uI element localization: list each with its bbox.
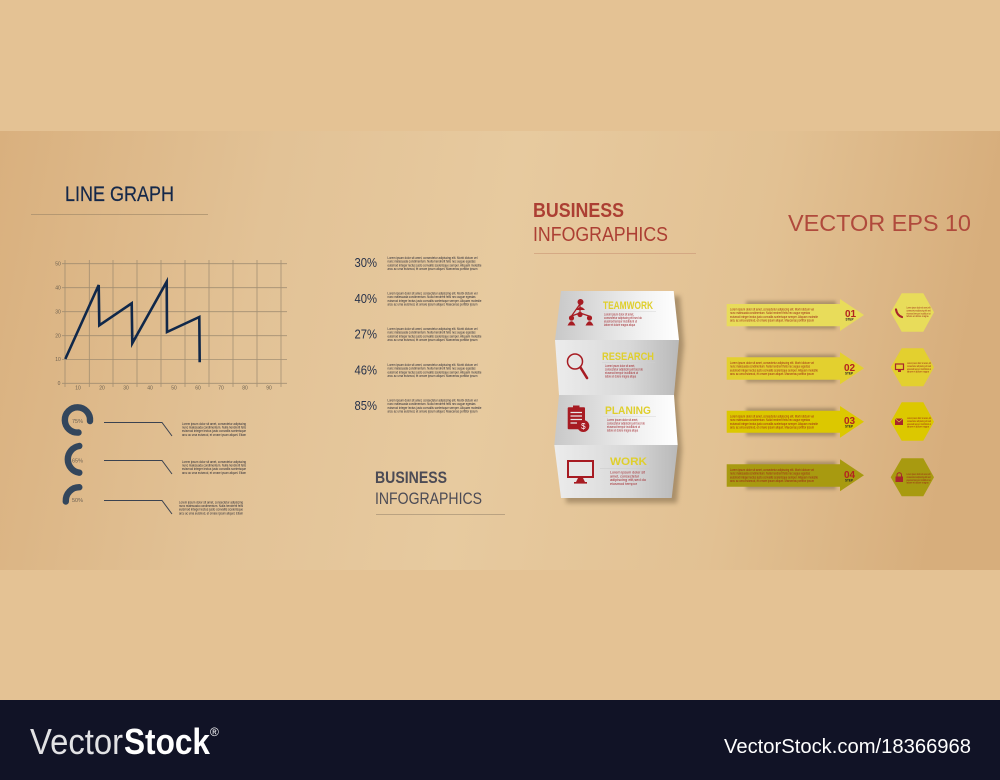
stat row 46%: euismod integer lectus justo convallis scelerisque semper. Aliquam molestie [388, 370, 482, 374]
donut row 65% [68, 446, 246, 475]
step arrow 04: euismod integer lectus justo convallis scelerisque semper. Aliquam molestie [730, 475, 818, 479]
stat row 40%: Lorem ipsum dolor sit amet, consectetur adipiscing elit. Morbi dictum vel [388, 292, 478, 296]
hexagon: mail: Lorem ipsum dolor sit amet, elit [907, 416, 931, 420]
step arrow 01: 01 [845, 309, 857, 320]
icon: padlock [896, 473, 903, 482]
step arrow 04 [727, 459, 864, 491]
step arrow 01: nunc malesuada condimentum. Nulla hendrerit felis nec augue egestas [730, 311, 810, 315]
step arrow 03: arcu ac urna euismod, et ornare ipsum aliquet. Maecenas porttitor ipsum [730, 426, 814, 430]
step arrow 04: STEP [845, 478, 854, 482]
stat row 40%: 40% [354, 292, 377, 306]
donut row 50%: 50% [72, 498, 83, 504]
step arrow 03: euismod integer lectus justo convallis scelerisque semper. Aliquam molestie [730, 422, 818, 426]
donut row 65%: euismod integer lectus justo convallis scelerisque [182, 467, 246, 471]
hexagon: lock: Lorem ipsum dolor sit amet, elit [906, 472, 931, 476]
y axis labels: 40 [55, 286, 61, 292]
donut row 65%: arcu ac urna euismod, et ornare ipsum aliquet. Etiam [182, 471, 246, 475]
donut row 75%: 75% [72, 419, 83, 425]
panel: planing: PLANING [605, 405, 651, 417]
step arrow 04: nunc malesuada condimentum. Nulla hendrerit felis nec augue egestas [730, 472, 810, 476]
panel: teamwork: Lorem ipsum dolor sit amet, [604, 312, 634, 316]
y axis labels: 30 [55, 310, 61, 316]
heading: business infographics grey: BUSINESS [375, 468, 447, 487]
stat row 85% [354, 398, 482, 414]
footer logo [30, 721, 219, 762]
title: vector eps 10: VECTOR EPS 10 [788, 210, 971, 236]
step arrow 01: STEP [846, 318, 854, 322]
stat row 27% [354, 327, 482, 342]
stat row 27%: nunc malesuada condimentum. Nulla hendrerit felis nec augue egestas [388, 331, 476, 335]
stat row 85%: euismod integer lectus justo convallis scelerisque semper. Aliquam molestie [388, 406, 482, 410]
panel: work: adipiscing elit,sed do [610, 478, 646, 482]
y axis labels: 20 [55, 334, 61, 340]
heading: business infographics grey: INFOGRAPHICS [375, 489, 482, 508]
panel: work: WORK [610, 456, 647, 468]
stat row 30%: euismod integer lectus justo convallis scelerisque semper. Aliquam molestie [388, 263, 482, 267]
stat row 85%: nunc malesuada condimentum. Nulla hendrerit felis nec augue egestas [388, 402, 476, 406]
panel: planing [554, 395, 678, 445]
stat row 85%: arcu ac urna euismod, et ornare ipsum aliquet. Maecenas porttitor ipsum [388, 410, 478, 414]
footer logo: Vector [30, 721, 123, 762]
stat row 27%: 27% [354, 328, 377, 342]
x axis labels: 90 [266, 386, 272, 392]
stat row 85%: 85% [354, 399, 377, 413]
x axis labels: 40 [147, 386, 153, 392]
x axis labels: 50 [171, 386, 177, 392]
stat row 40%: euismod integer lectus justo convallis scelerisque semper. Aliquam molestie [388, 299, 482, 303]
hexagon: lock: consectetur adipiscing elit sed [906, 475, 931, 479]
icon: envelope [895, 418, 903, 425]
step arrow 02: 02 [844, 363, 856, 374]
panel: teamwork: TEAMWORK [603, 300, 653, 312]
step arrow 03 [727, 406, 864, 438]
panel: teamwork: consectetur adipiscing elit sed do [604, 316, 642, 320]
heading: business infographics red [533, 200, 696, 254]
hexagon: lock: labore et dolore magna [906, 481, 929, 485]
footer bar [0, 700, 1000, 780]
panel: planing: consectetur adipiscing elit sed do [607, 422, 645, 426]
stat row 46%: arcu ac urna euismod, et ornare ipsum aliquet. Maecenas porttitor ipsum [388, 374, 478, 378]
donut row 75%: euismod integer lectus justo convallis scelerisque [182, 429, 246, 433]
icon: magnifier [568, 354, 587, 378]
step arrow 01 [727, 299, 864, 331]
panel: planing: Lorem ipsum dolor sit amet, [607, 418, 638, 422]
icon: small monitor [896, 364, 904, 372]
hexagon: monitor [891, 348, 934, 386]
heading: business infographics grey [375, 468, 505, 514]
step arrow 04: Lorem ipsum dolor sit amet, consectetur adipiscing elit. Morbi dictum vel [730, 468, 814, 472]
step arrow 04: arcu ac urna euismod, et ornare ipsum aliquet. Maecenas porttitor ipsum [730, 479, 814, 483]
footer url: VectorStock.com/18366968 [724, 736, 971, 758]
step arrow 04: 04 [844, 470, 856, 481]
step arrow 01: arcu ac urna euismod, et ornare ipsum aliquet. Maecenas porttitor ipsum [730, 319, 814, 323]
hexagon: lock [891, 458, 934, 496]
y axis labels: 50 [55, 262, 61, 268]
panel: work [554, 445, 678, 498]
data line [65, 282, 200, 362]
stat row 30%: Lorem ipsum dolor sit amet, consectetur adipiscing elit. Morbi dictum vel [388, 256, 478, 260]
donut row 75%: nunc malesuada condimentum. Nulla hendrerit felis [182, 426, 246, 430]
panel: planing: labore et dolore magna aliqua [607, 428, 638, 432]
donut row 65%: Lorem ipsum dolor sit amet, consectetur adipiscing [182, 460, 246, 464]
footer logo: ® [210, 725, 219, 739]
x axis labels: 60 [195, 386, 201, 392]
hexagon: phone: labore et dolore magna [906, 314, 929, 318]
hexagon: mail: eiusmod tempor incididunt ut [907, 422, 931, 426]
stat row 40%: arcu ac urna euismod, et ornare ipsum aliquet. Maecenas porttitor ipsum [388, 303, 478, 307]
hexagon: monitor: labore et dolore magna [907, 370, 929, 374]
donut row 50%: nunc malesuada condimentum. Nulla hendrerit felis [179, 504, 243, 508]
stat row 40%: nunc malesuada condimentum. Nulla hendrerit felis nec augue egestas [388, 295, 476, 299]
panel: work: amet, consectetur [610, 474, 640, 478]
donut row 75%: Lorem ipsum dolor sit amet, consectetur adipiscing [182, 422, 246, 426]
donut row 75% [65, 407, 246, 437]
panel: research [555, 340, 679, 395]
step arrow 02: euismod integer lectus justo convallis scelerisque semper. Aliquam molestie [730, 368, 818, 372]
stat row 30% [354, 256, 482, 271]
panel: work: eiusmod tempor [610, 482, 638, 486]
x axis labels [75, 386, 272, 392]
icon: monitor [568, 461, 593, 484]
stat row 27%: euismod integer lectus justo convallis scelerisque semper. Aliquam molestie [388, 334, 482, 338]
hexagon: mail: labore et dolore magna [907, 425, 929, 429]
stat row 27%: Lorem ipsum dolor sit amet, consectetur adipiscing elit. Morbi dictum vel [388, 327, 478, 331]
donut row 50%: arcu ac urna euismod, et ornare ipsum aliquet. Etiam [179, 511, 243, 515]
y axis labels: 10 [55, 357, 61, 363]
panel: research: Lorem ipsum dolor sit amet, [605, 364, 635, 368]
stat row 30%: 30% [354, 256, 377, 270]
step arrow 02: arcu ac urna euismod, et ornare ipsum aliquet. Maecenas porttitor ipsum [730, 372, 814, 376]
panel: work: Lorem ipsum dolor sit [610, 470, 645, 474]
panel: research: labore et dolore magna aliqua [605, 374, 636, 378]
donut row 65%: 65% [72, 458, 83, 464]
stat row 30%: nunc malesuada condimentum. Nulla hendrerit felis nec augue egestas [388, 260, 476, 264]
donut row 50%: euismod integer lectus justo convallis scelerisque [179, 508, 243, 512]
stat row 46%: 46% [354, 364, 377, 378]
y axis labels [55, 262, 61, 387]
x axis labels: 30 [123, 386, 129, 392]
stat row 27%: arcu ac urna euismod, et ornare ipsum aliquet. Maecenas porttitor ipsum [388, 338, 478, 342]
icon: clipboard with dollar: $ [581, 422, 586, 431]
stat row 85%: Lorem ipsum dolor sit amet, consectetur adipiscing elit. Morbi dictum vel [388, 398, 478, 402]
panel: research: RESEARCH [602, 351, 654, 363]
step arrow 01: Lorem ipsum dolor sit amet, consectetur adipiscing elit. Morbi dictum vel [730, 308, 814, 312]
x axis labels: 80 [242, 386, 248, 392]
step arrow 03: Lorem ipsum dolor sit amet, consectetur adipiscing elit. Morbi dictum vel [730, 414, 814, 418]
heading: line graph: LINE GRAPH [65, 183, 174, 206]
folded paper panel [554, 291, 684, 503]
step arrow 03: STEP [845, 424, 854, 428]
hexagon: phone: eiusmod tempor incididunt ut [906, 311, 931, 315]
hexagon: phone [891, 293, 934, 332]
panel: planing: eiusmod tempor incididunt ut [607, 425, 640, 429]
step arrow 02: Lorem ipsum dolor sit amet, consectetur adipiscing elit. Morbi dictum vel [730, 361, 814, 365]
donut row 50% [66, 487, 243, 515]
panel: research: eiusmod tempor incididunt ut [605, 371, 638, 375]
icon: team network [568, 299, 594, 326]
donut row 50%: Lorem ipsum dolor sit amet, consectetur adipiscing [179, 500, 243, 504]
panel: research: consectetur adipiscing elit sed do [605, 368, 643, 372]
donut row 75%: arcu ac urna euismod, et ornare ipsum aliquet. Etiam [182, 433, 246, 437]
hexagon: mail [891, 402, 934, 441]
hexagon: monitor: consectetur adipiscing elit sed [907, 364, 931, 368]
line chart [55, 260, 287, 392]
stat row 40% [354, 292, 482, 307]
background band [0, 131, 1000, 570]
step arrow 03: nunc malesuada condimentum. Nulla hendrerit felis nec augue egestas [730, 418, 810, 422]
icon: phone [896, 310, 902, 317]
step arrow 02: STEP [845, 372, 854, 376]
stat row 46%: Lorem ipsum dolor sit amet, consectetur adipiscing elit. Morbi dictum vel [388, 363, 478, 367]
panel: teamwork [555, 291, 679, 340]
y axis labels: 0 [58, 381, 61, 387]
step arrow 01: euismod integer lectus justo convallis scelerisque semper. Aliquam molestie [730, 315, 818, 319]
hexagon: mail: consectetur adipiscing elit sed [907, 419, 931, 423]
hexagon: monitor: Lorem ipsum dolor sit amet, elit [907, 361, 931, 365]
x axis labels: 70 [218, 386, 224, 392]
stat row 46%: nunc malesuada condimentum. Nulla hendrerit felis nec augue egestas [388, 367, 476, 371]
x axis labels: 20 [99, 386, 105, 392]
donut row 65%: nunc malesuada condimentum. Nulla hendrerit felis [182, 464, 246, 468]
panel: teamwork: labore et dolore magna aliqua [604, 323, 635, 327]
hexagon: monitor: eiusmod tempor incididunt ut [907, 367, 931, 371]
heading: business infographics red: BUSINESS [533, 200, 624, 222]
hexagon: phone: consectetur adipiscing elit sed [906, 308, 931, 312]
panel: teamwork: eiusmod tempor incididunt ut [604, 320, 637, 324]
footer logo: Stock [124, 721, 211, 762]
heading: business infographics red: INFOGRAPHICS [533, 224, 668, 246]
hexagon: phone: Lorem ipsum dolor sit amet, elit [906, 306, 931, 310]
hexagon: lock: eiusmod tempor incididunt ut [906, 478, 931, 482]
step arrow 03: 03 [844, 416, 856, 427]
step arrow 02: nunc malesuada condimentum. Nulla hendrerit felis nec augue egestas [730, 365, 810, 369]
step arrow 02 [727, 352, 864, 384]
stat row 30%: arcu ac urna euismod, et ornare ipsum aliquet. Maecenas porttitor ipsum [388, 267, 478, 271]
stat row 46% [354, 363, 482, 378]
x axis labels: 10 [75, 386, 81, 392]
